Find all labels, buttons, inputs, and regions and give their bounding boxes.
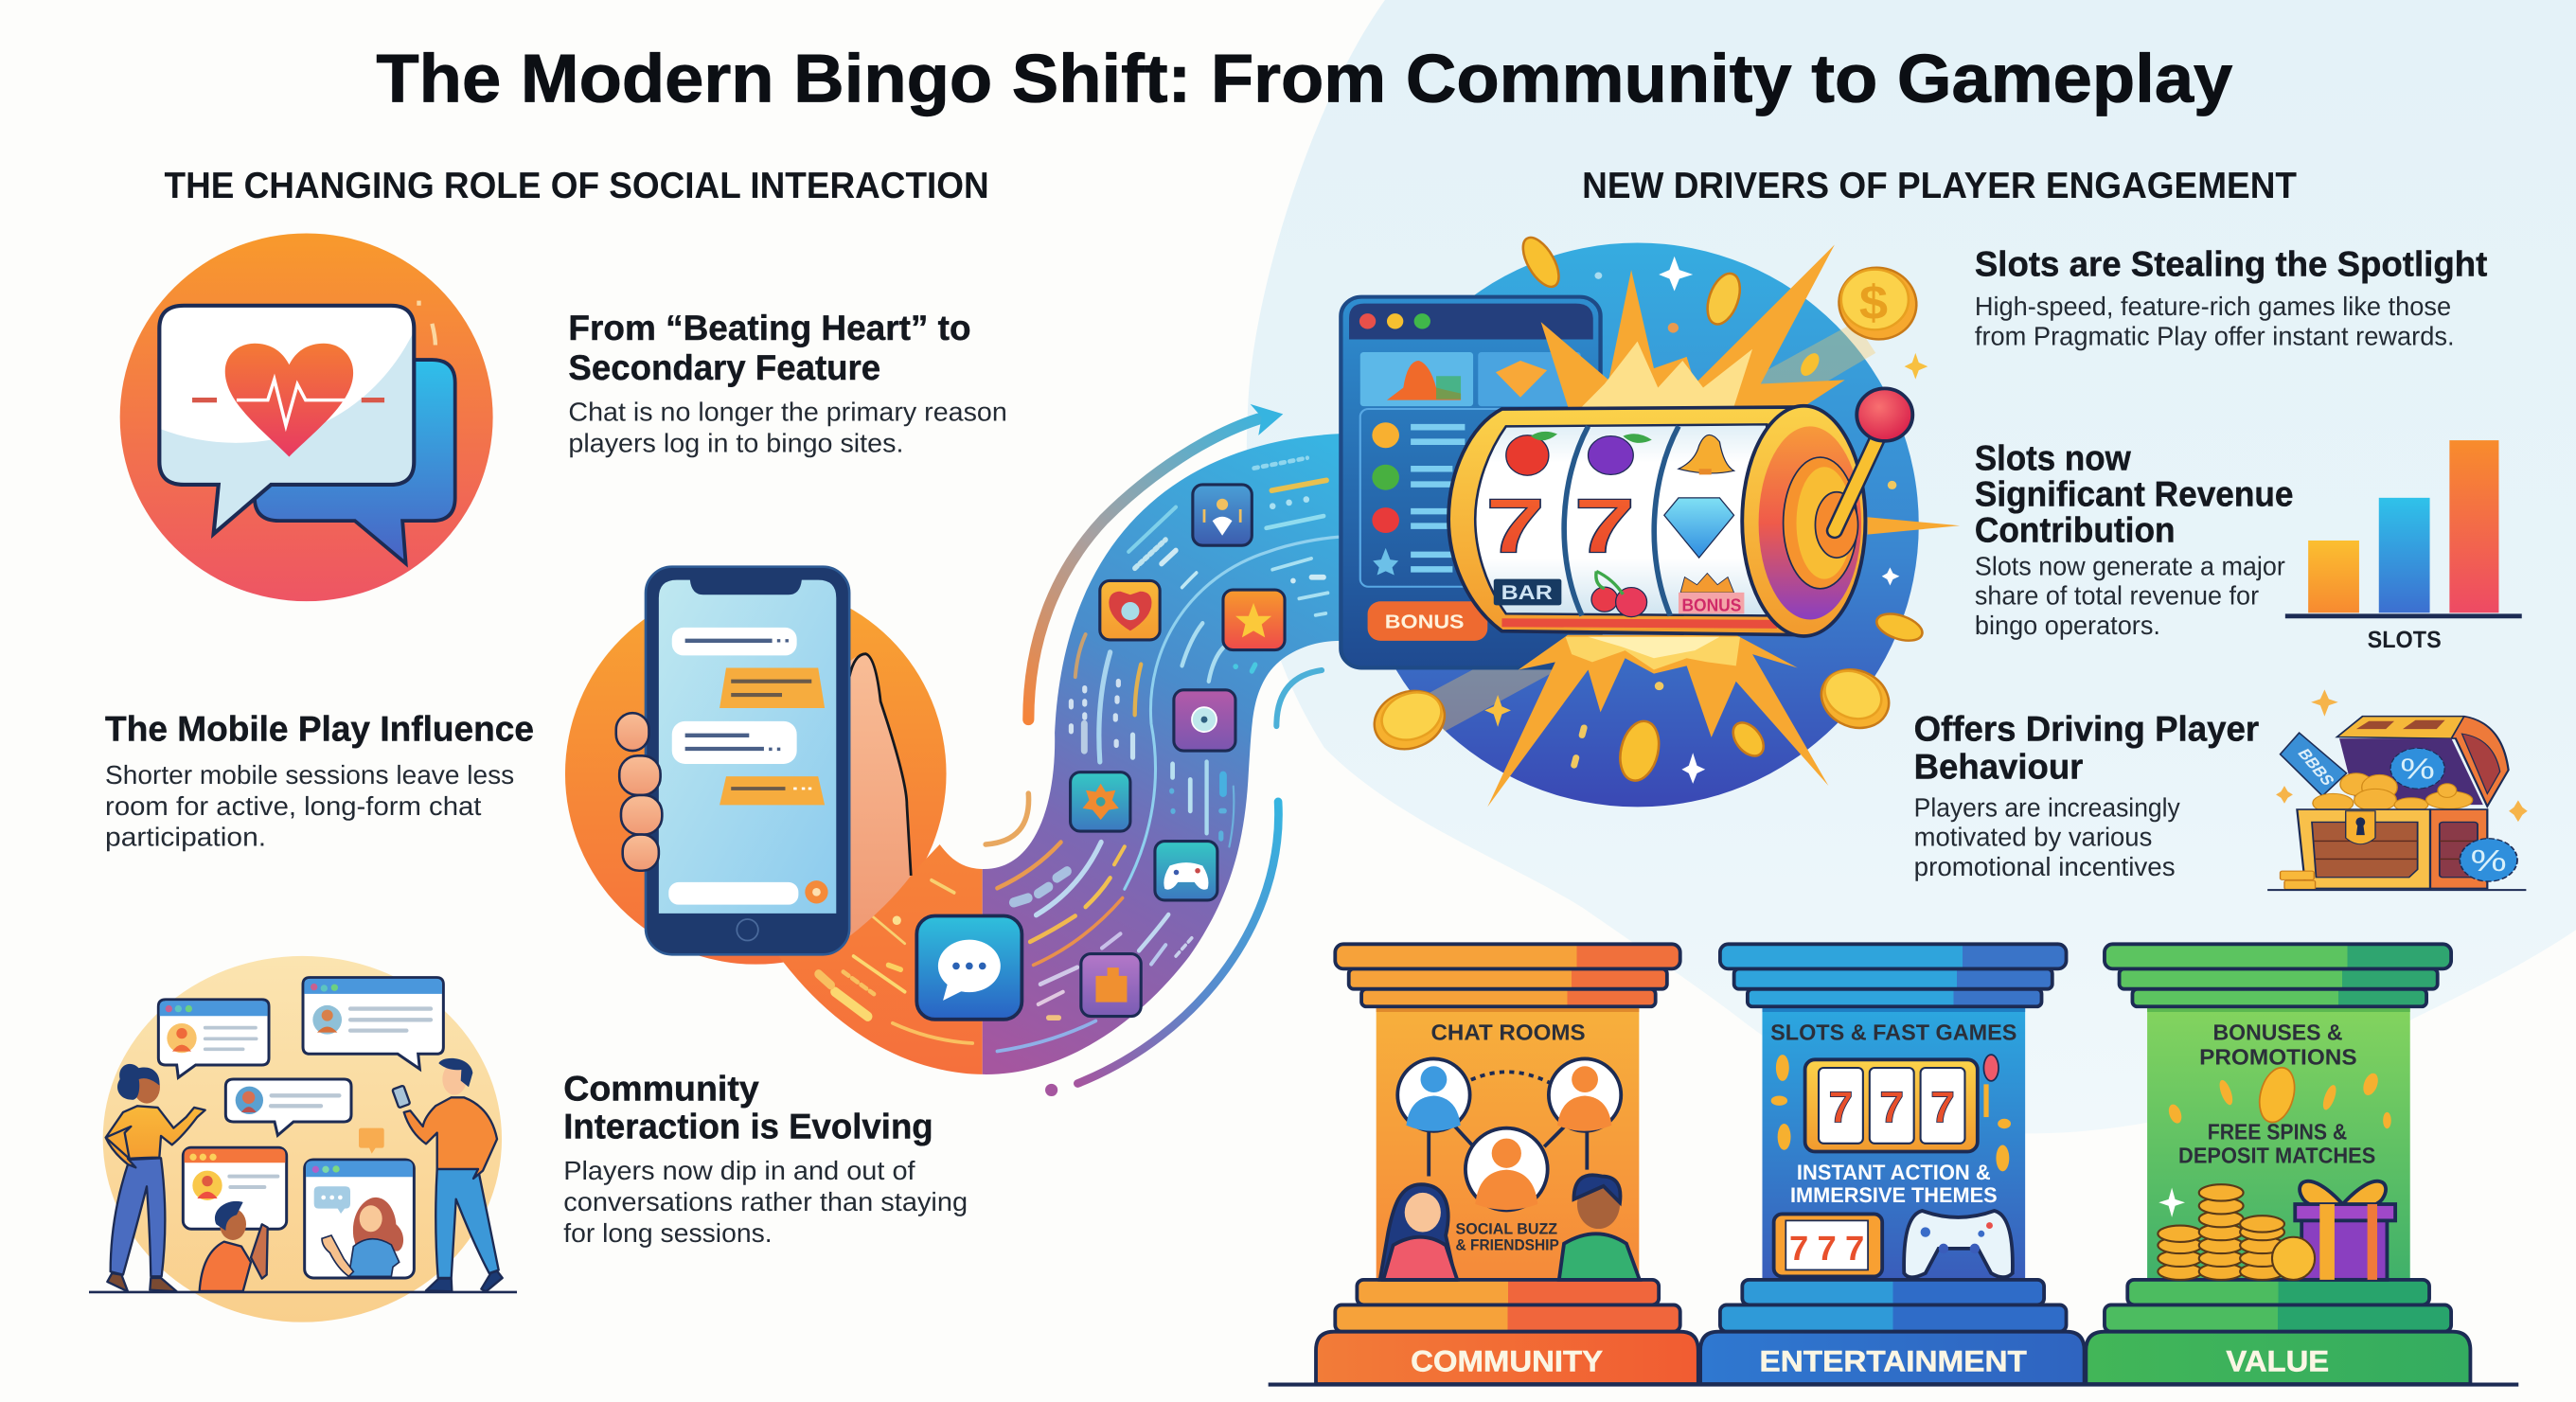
text: slots spotlight: Slots are Stealing the Spotlight [1975,245,2487,284]
bonus button: BONUS [1385,611,1465,632]
phone slot [1774,1214,1882,1276]
symbols: 7 [1485,483,1545,569]
browser window [1341,297,1601,667]
text: slots spotlight: from Pragmatic Play offer instant rewards. [1975,324,2455,351]
badge 2 [2460,839,2517,881]
pillar: entertainment [1700,944,2085,1384]
icon: treasure chest [2267,689,2528,890]
pillars group [1269,944,2518,1385]
icon: user badge [1193,485,1252,545]
illustration: slot machine [1341,233,1960,807]
pillar: value [2086,944,2470,1384]
text: slots spotlight [1975,245,2487,351]
icon: puzzle [1081,954,1141,1017]
pillar: community: SOCIAL BUZZ [1456,1220,1557,1238]
text: community interaction: conversations rather than staying [563,1189,968,1217]
chat bubble 2 [720,667,825,708]
pillar: community: & FRIENDSHIP [1456,1237,1560,1255]
lever [1835,388,1912,531]
drum end [1742,406,1865,636]
fingers [616,713,662,871]
orange circle behind phone [565,583,947,965]
shelf line [2267,887,2526,893]
input bar [668,880,828,905]
bonus button [1368,601,1487,641]
title: The Modern Bingo Shift: From Community to Gameplay [376,40,2232,116]
bubble: small orange [359,1128,384,1154]
floating coins [2166,1064,2391,1128]
mini slot machine: 7 [1879,1083,1904,1132]
phone slot: 7 [1789,1231,1808,1269]
hand behind phone [838,654,911,936]
symbols [1485,432,1744,617]
text: community interaction: Players now dip in and out of [563,1158,916,1186]
swoosh ribbon [779,434,1341,1074]
badge [2390,748,2444,789]
text: beating heart [568,309,1007,458]
text: revenue contribution: Contribution [1975,511,2176,550]
icon: star [1223,590,1285,650]
mini slot machine [1771,1055,2011,1171]
people network [1397,1058,1621,1210]
text: mobile play: room for active, long-form chat [105,793,482,822]
pillar: value: PROMOTIONS [2199,1045,2357,1070]
ticket [2281,733,2347,796]
text: beating heart: Chat is no longer the primary reason [568,399,1007,427]
symbols: BAR [1501,581,1553,604]
ribbon icons [916,485,1285,1020]
pillar: value: VALUE [2226,1345,2329,1377]
icon: chat [916,915,1022,1020]
bar chart: slots revenue: SLOTS [2368,628,2442,654]
badge: % [2400,753,2435,785]
text: revenue contribution: Slots now generate a major [1975,554,2286,581]
illustration: people chatting [89,956,517,1322]
bubble: middle [225,1079,351,1135]
icon: heart chat bubbles [120,233,493,601]
text: revenue contribution: share of total revenue for [1975,583,2260,612]
text: revenue contribution [1975,438,2294,641]
pillar: entertainment: ENTERTAINMENT [1760,1345,2027,1377]
text: mobile play: The Mobile Play Influence [105,710,534,749]
chat bubble 3 [672,721,797,764]
pillar: value: DEPOSIT MATCHES [2178,1144,2375,1168]
text: revenue contribution: Slots now [1975,438,2131,478]
text: offers: promotional incentives [1914,854,2176,882]
pillar: value: BONUSES & [2212,1020,2343,1045]
text: mobile play [105,710,534,853]
phone slot: 7 [1845,1231,1864,1269]
ticket: BBBS [2294,746,2338,788]
heading: player engagement: NEW DRIVERS OF PLAYER ENGAGEMENT [1582,165,2297,206]
icon: gear [1071,772,1130,831]
coin stack [2281,871,2316,889]
text: slots spotlight: High-speed, feature-rich games like those [1975,294,2451,322]
icon: apple heart [1100,580,1160,640]
person: right man [392,1058,503,1291]
pillar: value: FREE SPINS & [2208,1119,2348,1145]
mini slot machine: 7 [1828,1083,1853,1132]
badge 2: % [2471,843,2507,878]
coin stacks [2158,1184,2315,1280]
flying coins: $ [1859,275,1888,329]
symbols: BONUS [1681,595,1741,615]
person: crouching [200,1201,268,1291]
text: offers [1914,710,2260,882]
ribbon data dashes [819,458,1338,1052]
pillar: community: COMMUNITY [1411,1345,1603,1377]
man figure [1559,1175,1640,1280]
heading: social interaction: THE CHANGING ROLE OF SOCIAL INTERACTION [165,165,989,206]
icon: controller [1155,842,1217,900]
mini slot machine: 7 [1930,1083,1955,1132]
ground line [89,1288,517,1296]
text: community interaction: Interaction is Evolving [563,1108,933,1146]
text: community interaction: for long sessions. [563,1220,773,1249]
chest body [2297,809,2430,888]
gold [2313,773,2473,812]
text: mobile play: participation. [105,825,266,853]
pillar: entertainment: SLOTS & FAST GAMES [1770,1020,2016,1045]
sparkles [2276,689,2528,822]
text: community interaction: Community [563,1070,759,1109]
sparkles [1484,257,1928,784]
window: lower right with woman [305,1160,414,1278]
text: revenue contribution: bingo operators. [1975,612,2160,641]
pillar: entertainment: INSTANT ACTION & [1797,1160,1991,1184]
gift box [2295,1181,2395,1280]
bar chart: slots revenue [2285,440,2522,654]
flying coins [1364,233,1930,784]
text: offers: motivated by various [1914,825,2152,853]
phone slot: 7 [1818,1231,1837,1269]
pillar: community: CHAT ROOMS [1430,1020,1586,1045]
drum [1448,406,1865,636]
pillars ground line [1269,1383,2518,1386]
woman figure [1380,1184,1457,1280]
text: offers: Behaviour [1914,748,2084,787]
pillar: entertainment: IMMERSIVE THEMES [1790,1182,1998,1207]
bubble: top left [158,1000,269,1077]
window: lower left [183,1147,287,1229]
blue burst circle [1356,242,1919,807]
symbols: 7 [1573,483,1635,569]
game controller [1904,1211,2013,1277]
bubble: top right [303,978,443,1069]
decorative arcs [986,670,1322,1096]
chat bubble 4 [720,776,825,805]
pillar: community [1316,944,1698,1384]
icon: purple eye [1174,690,1235,751]
text: revenue contribution: Significant Revenue [1975,475,2294,514]
text: beating heart: players log in to bingo sites. [568,431,903,458]
phone [646,567,849,954]
coin light beams [1422,322,1875,732]
background blob [1247,0,2576,1133]
text: community interaction [563,1070,968,1249]
text: offers: Offers Driving Player [1914,710,2260,749]
person: left woman [106,1064,205,1291]
text: mobile play: Shorter mobile sessions leave less [105,762,514,790]
explosion burst [1487,245,1960,807]
chat bubble 1 [672,628,797,655]
text: beating heart: Secondary Feature [568,348,880,388]
text: offers: Players are increasingly [1914,795,2180,823]
lid [2337,717,2509,807]
arrow: curved growth arrow [1028,404,1283,719]
text: beating heart: From “Beating Heart” to [568,309,971,348]
